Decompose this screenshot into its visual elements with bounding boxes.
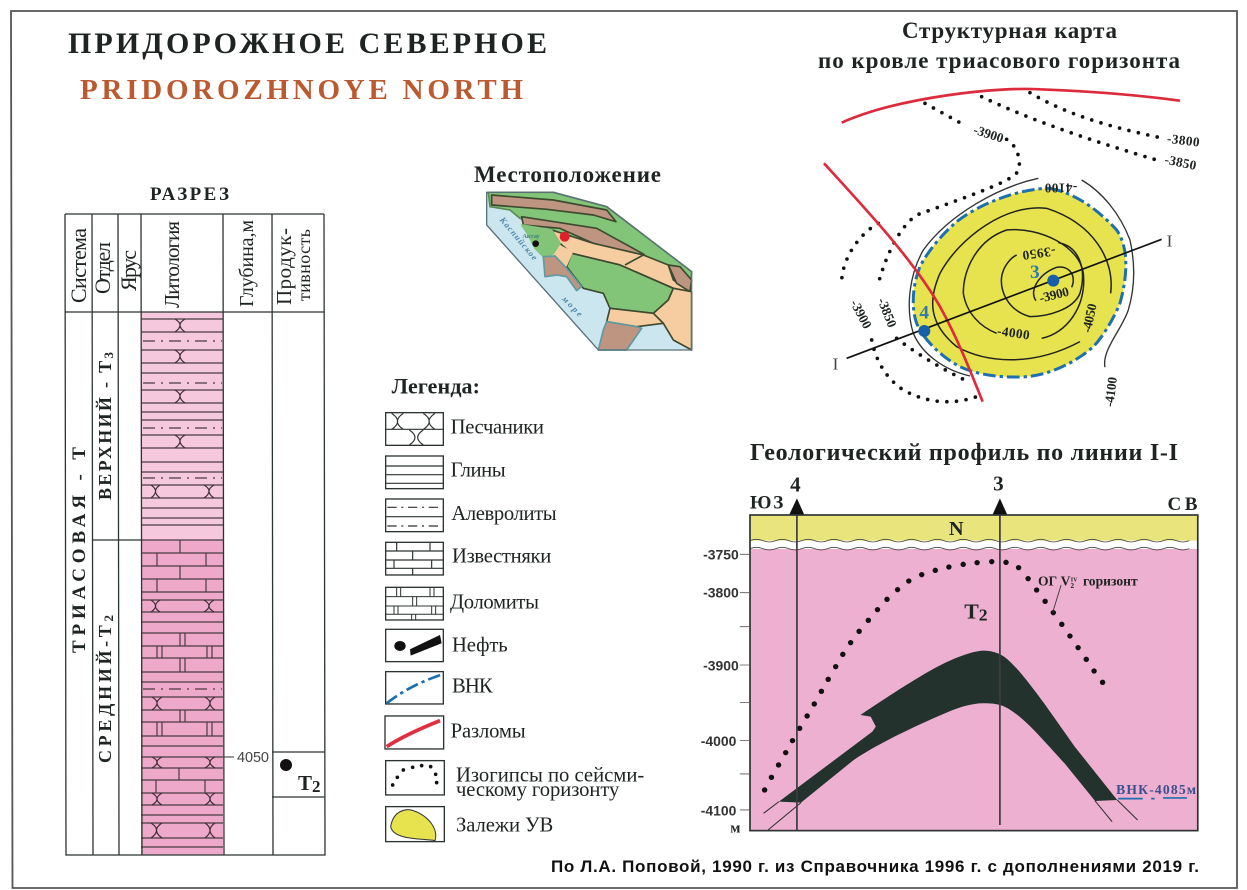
T2 label: 2: [979, 604, 988, 624]
legend item: isohypses: [386, 761, 644, 801]
heading: structural map: по кровле триасового горизонта: [818, 48, 1180, 73]
contour -4000: [963, 230, 1084, 338]
land layers: [488, 192, 692, 350]
upper series label: ВЕРХНИЙ - Т: [95, 361, 115, 500]
legend item: hydrocarbon deposits: Залежи УВ: [456, 815, 553, 837]
outline: [487, 192, 692, 350]
unconformity band: [750, 539, 1198, 550]
horizon label: 2: [1070, 581, 1074, 590]
compass label northeast: СВ: [1168, 494, 1198, 515]
legend item: oil: [386, 629, 508, 662]
heading: section: РАЗРЕЗ: [150, 184, 229, 205]
legend item: sandstone: Песчаники: [451, 416, 544, 438]
column header: productivity: Продук-: [272, 228, 296, 305]
heading: geological profile: Геологический профиль по линии I-I: [750, 440, 1178, 466]
well 3: 3: [993, 472, 1004, 496]
legend item: siltstone: Алевролиты: [451, 503, 557, 525]
depth axis: -3750: [703, 547, 739, 562]
city label: Актау: [522, 233, 541, 240]
oil deposit: [779, 651, 1117, 803]
horizon label: [1038, 573, 1138, 613]
depth axis: -4100: [701, 803, 737, 818]
well 4: [789, 473, 804, 831]
middle series label: СРЕДНИЙ-Т: [95, 625, 115, 763]
legend item: clay: Глины: [451, 460, 506, 482]
panel: stratigraphic section: [65, 214, 325, 855]
contour labels: -3900: [847, 297, 875, 331]
source note: По Л.А. Поповой, 1990 г. из Справочника 1996 г. с дополнениями 2019 г.: [551, 857, 1199, 876]
legend item: siltstone: [386, 499, 557, 532]
legend item: limestone: Известняки: [452, 546, 551, 568]
neogene label: N: [949, 518, 964, 540]
legend item: hydrocarbon deposits: [386, 807, 553, 842]
depth axis: -4000: [701, 734, 737, 749]
horizon label: IV: [1071, 577, 1078, 583]
heading: structural map: Структурная карта: [902, 18, 1118, 43]
horizon label: ОГ V: [1038, 573, 1070, 588]
contour -3900: [1034, 267, 1073, 301]
contour labels: -3900: [972, 122, 1006, 146]
lithology pattern lines: [141, 319, 223, 847]
fault: north: [842, 89, 1180, 123]
legend item: clay: [386, 456, 506, 489]
contour labels: -4000: [996, 323, 1031, 343]
depth axis: -3800: [703, 586, 739, 601]
geological cross-section: [701, 472, 1198, 836]
contour labels: -3950: [1021, 244, 1057, 263]
depth marker: 4050: [237, 750, 269, 766]
sandstone marks: [151, 319, 215, 838]
column header: system: Система: [66, 228, 91, 303]
contour -3950: [1001, 243, 1082, 317]
oil-water contact label: ВНК-4085м: [1116, 782, 1196, 797]
productive horizon: Т: [298, 771, 312, 795]
well 4: [918, 303, 930, 337]
well 3: [1030, 262, 1059, 287]
Aktau marker: [532, 240, 539, 247]
legend item: dolomite: Доломиты: [450, 591, 539, 613]
sea: [487, 192, 692, 350]
column header: stage: Ярус: [116, 250, 141, 291]
compass labels: ЮЗ: [750, 493, 783, 514]
neogene layer: [750, 515, 1198, 541]
structural map: [824, 89, 1201, 408]
column header: division: Отдел: [90, 242, 115, 294]
lithology column lower: [141, 540, 223, 855]
contour labels: [847, 122, 1201, 408]
contour labels: -4050: [1079, 302, 1100, 334]
contour -4050: [933, 208, 1111, 360]
system label: ТРИАСОВАЯ - Т: [69, 447, 90, 653]
title: English: PRIDOROZHNOYE NORTH: [80, 74, 523, 106]
T2 strata: [750, 548, 1198, 831]
column header: lithology: Литология: [160, 221, 184, 308]
sea label second word: море: [560, 293, 585, 319]
section line labels: I: [1167, 232, 1173, 251]
seismic horizon dots: [762, 559, 1105, 793]
location map: [487, 192, 692, 350]
column header: productivity second line: тивность: [294, 229, 314, 301]
well 3: 3: [1030, 262, 1040, 283]
sea label: Каспийское: [497, 214, 540, 262]
well 4: 4: [790, 473, 801, 497]
hydrocarbon deposit with oil-water contact: [913, 188, 1126, 377]
siltstone dashes: [143, 341, 222, 689]
faults below deposit: [764, 800, 1138, 830]
horizon label: горизонт: [1080, 573, 1138, 588]
legend: [385, 373, 644, 842]
depth axis: [701, 547, 750, 836]
table grid: [65, 214, 325, 855]
legend heading: Легенда:: [392, 373, 480, 398]
contour labels: -4100: [1101, 376, 1120, 408]
well 3: [992, 472, 1007, 825]
contour labels: -3800: [1166, 131, 1201, 150]
field marker: [560, 232, 570, 242]
legend item: oil: Нефть: [452, 635, 508, 657]
heading: location: Местоположение: [474, 162, 661, 187]
heading: structural map: [818, 18, 1180, 73]
section line label west: I: [833, 354, 839, 373]
legend item: dolomite: [386, 587, 539, 620]
productive horizon: 2: [312, 777, 321, 796]
contour -4100: [909, 178, 1134, 376]
depth axis: -3900: [703, 658, 739, 673]
legend item: faults: [385, 716, 526, 749]
productive horizon: [280, 759, 321, 796]
seismic isohypses: [842, 93, 1163, 402]
legend item: isohypses: ческому горизонту: [456, 779, 620, 801]
contour labels: -3850: [875, 295, 900, 330]
legend item: oil-water contact: [386, 672, 493, 704]
legend item: faults: Разломы: [451, 721, 526, 743]
contour labels: -3900: [1038, 284, 1071, 306]
legend item: isohypses: Изогипсы по сейсми-: [456, 765, 644, 787]
legend item: limestone: [386, 542, 551, 575]
upper series label: 3: [101, 352, 116, 358]
title: Russian: ПРИДОРОЖНОЕ СЕВЕРНОЕ: [68, 27, 547, 60]
frame: [750, 515, 1198, 831]
depth axis: м: [730, 820, 740, 836]
fault: west: [824, 163, 983, 402]
contour labels: -3850: [1163, 152, 1198, 173]
section line I-I: [847, 239, 1162, 358]
column header: depth: Глубина,м: [236, 220, 258, 307]
legend item: oil-water contact: ВНК: [452, 676, 493, 698]
middle series label: 2: [101, 615, 116, 622]
T2 label: Т: [964, 600, 979, 623]
legend item: sandstone: [386, 413, 544, 445]
contour labels: -4100: [1044, 180, 1077, 195]
well 4: 4: [919, 303, 929, 324]
lithology column upper: [141, 312, 223, 540]
